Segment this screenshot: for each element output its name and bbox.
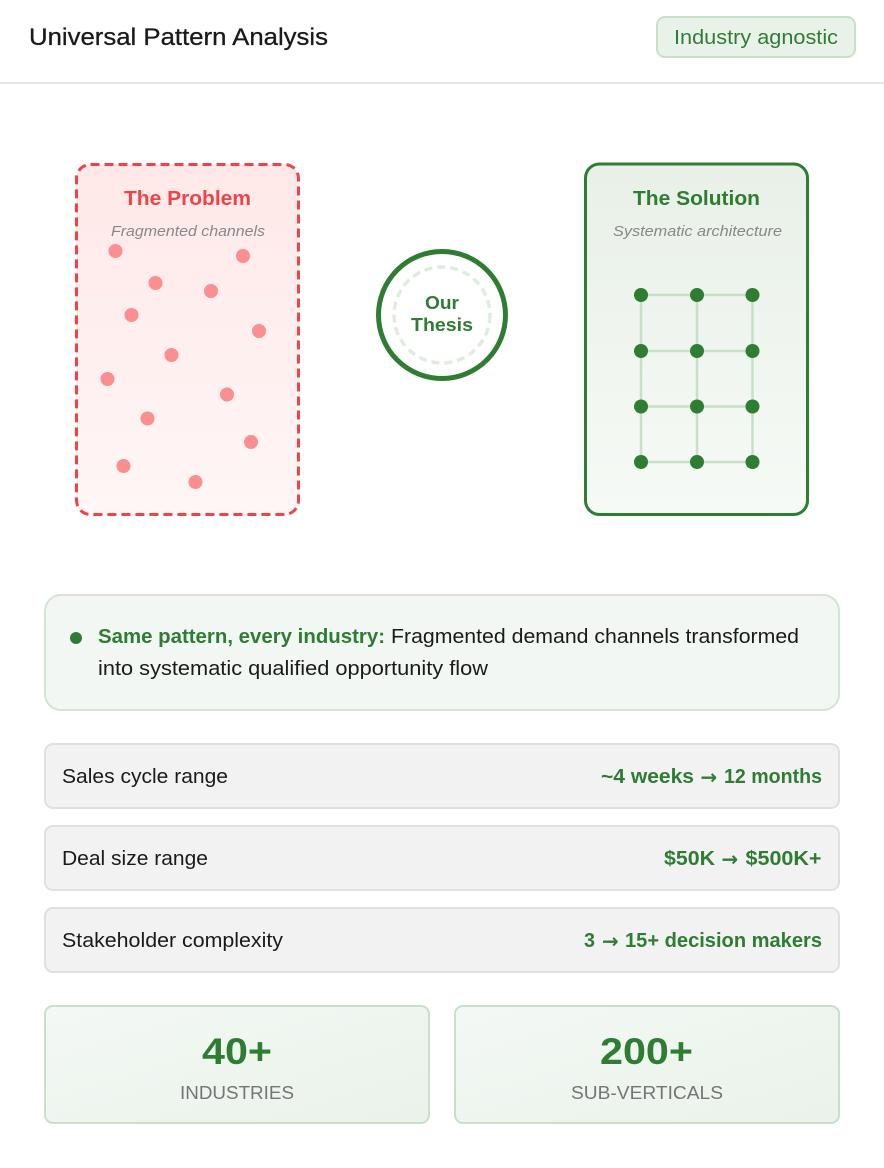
scattered dots — [100, 244, 266, 489]
row: deal size: $500K+ — [746, 847, 822, 870]
stat: sub-verticals: SUB-VERTICALS — [571, 1083, 723, 1103]
panel: the solution — [586, 164, 808, 514]
callout: Same pattern, every industry: — [98, 625, 385, 648]
problem heading: The Problem — [124, 187, 251, 210]
stat: sub-verticals — [455, 1006, 839, 1123]
row: sales cycle: → — [700, 765, 717, 789]
row: stakeholder complexity: 3 — [584, 929, 595, 952]
stat: sub-verticals: 200+ — [600, 1031, 693, 1072]
thesis circle — [378, 252, 506, 378]
callout: Fragmented demand channels transformed — [391, 625, 799, 648]
row: deal size — [45, 826, 839, 890]
stat: industries — [45, 1006, 429, 1123]
header — [0, 17, 884, 84]
row: stakeholder complexity: 15+ decision makers — [625, 929, 822, 952]
solution heading: The Solution — [633, 187, 760, 210]
callout — [45, 595, 839, 710]
badge: industry agnostic — [657, 17, 855, 57]
title: Universal Pattern Analysis — [29, 24, 328, 51]
row: stakeholder complexity: Stakeholder complexity — [62, 929, 284, 952]
row: deal size: → — [722, 847, 738, 871]
row: stakeholder complexity: → — [602, 929, 619, 953]
panel: the problem — [76, 164, 298, 514]
row: deal size: Deal size range — [62, 847, 208, 870]
stat: industries: 40+ — [202, 1031, 272, 1072]
row: sales cycle: ~4 weeks — [601, 765, 694, 788]
callout: into systematic qualified opportunity flow — [98, 657, 488, 680]
row: stakeholder complexity — [45, 908, 839, 972]
stat: industries: INDUSTRIES — [180, 1083, 294, 1103]
badge: industry agnostic: Industry agnostic — [674, 26, 838, 49]
row: sales cycle — [45, 744, 839, 808]
thesis circle: Our — [425, 292, 459, 313]
solution subtitle: Systematic architecture — [613, 223, 782, 240]
row: sales cycle: 12 months — [724, 765, 822, 788]
row: deal size: $50K — [664, 847, 715, 870]
network grid — [634, 288, 760, 469]
problem subtitle: Fragmented channels — [111, 223, 266, 240]
row: sales cycle: Sales cycle range — [62, 765, 228, 788]
thesis circle: Thesis — [411, 314, 473, 335]
